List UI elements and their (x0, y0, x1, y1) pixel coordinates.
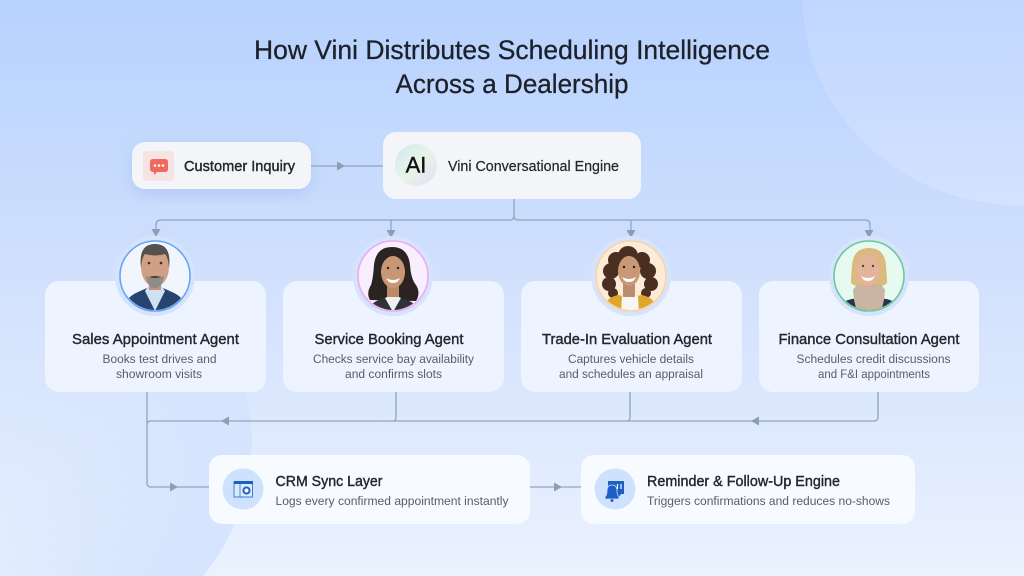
arrow: customer inquiry to engine (310, 162, 383, 170)
panel: reminder and follow-up engine: Triggers confirmations and reduces no-shows (647, 494, 890, 508)
panel: finance consultation agent: Schedules credit discussions (796, 352, 950, 366)
panel: sales appointment agent: Books test drives and (102, 352, 216, 366)
avatar: service agent (353, 236, 433, 316)
panel: finance consultation agent (759, 236, 979, 392)
title: Across a Dealership (396, 69, 628, 99)
panel: service booking agent (283, 236, 504, 392)
panel: reminder and follow-up engine: Reminder & Follow-Up Engine (647, 473, 840, 490)
panel: trade-in evaluation agent: Trade-In Evaluation Agent (542, 331, 713, 348)
panel: trade-in evaluation agent: and schedules an appraisal (559, 367, 703, 381)
panel: sales appointment agent (45, 236, 266, 392)
panel: finance consultation agent: Finance Consultation Agent (778, 331, 960, 348)
panel: reminder and follow-up engine (581, 455, 915, 524)
title: How Vini Distributes Scheduling Intelligence (254, 35, 770, 65)
avatar: trade-in agent (591, 236, 671, 316)
panel: customer inquiry: Customer Inquiry (184, 158, 295, 175)
panel: CRM sync layer: Logs every confirmed appointment instantly (276, 494, 509, 508)
icon: CRM window (222, 468, 264, 510)
panel: finance consultation agent: and F&I appointments (818, 367, 930, 381)
icon: bell with alert (594, 468, 636, 510)
icon: AI badge (395, 144, 437, 186)
panel: Vini conversational engine (383, 132, 641, 199)
avatar: sales agent (115, 236, 195, 316)
panel: sales appointment agent: Sales Appointment Agent (72, 331, 240, 348)
background circle: bottom left (0, 227, 252, 576)
background circle: top right (803, 0, 1024, 206)
arrow: CRM to reminder (530, 482, 581, 492)
connector: engine to agents (152, 199, 874, 240)
panel: trade-in evaluation agent: Captures vehicle details (568, 352, 694, 366)
panel: trade-in evaluation agent (521, 236, 742, 392)
icon: AI badge: AI (406, 152, 426, 178)
connector: agents to CRM (147, 392, 878, 492)
avatar: finance agent (829, 236, 909, 316)
title (254, 35, 770, 99)
panel: CRM sync layer: CRM Sync Layer (276, 473, 382, 490)
panel: service booking agent: and confirms slots (345, 367, 442, 381)
panel: customer inquiry (132, 142, 311, 189)
icon: chat bubble (143, 151, 174, 181)
panel: CRM sync layer (209, 455, 530, 524)
panel: sales appointment agent: showroom visits (116, 367, 202, 381)
panel: service booking agent: Service Booking Agent (314, 331, 464, 348)
panel: Vini conversational engine: Vini Conversational Engine (448, 159, 619, 175)
panel: service booking agent: Checks service bay availability (313, 352, 475, 366)
